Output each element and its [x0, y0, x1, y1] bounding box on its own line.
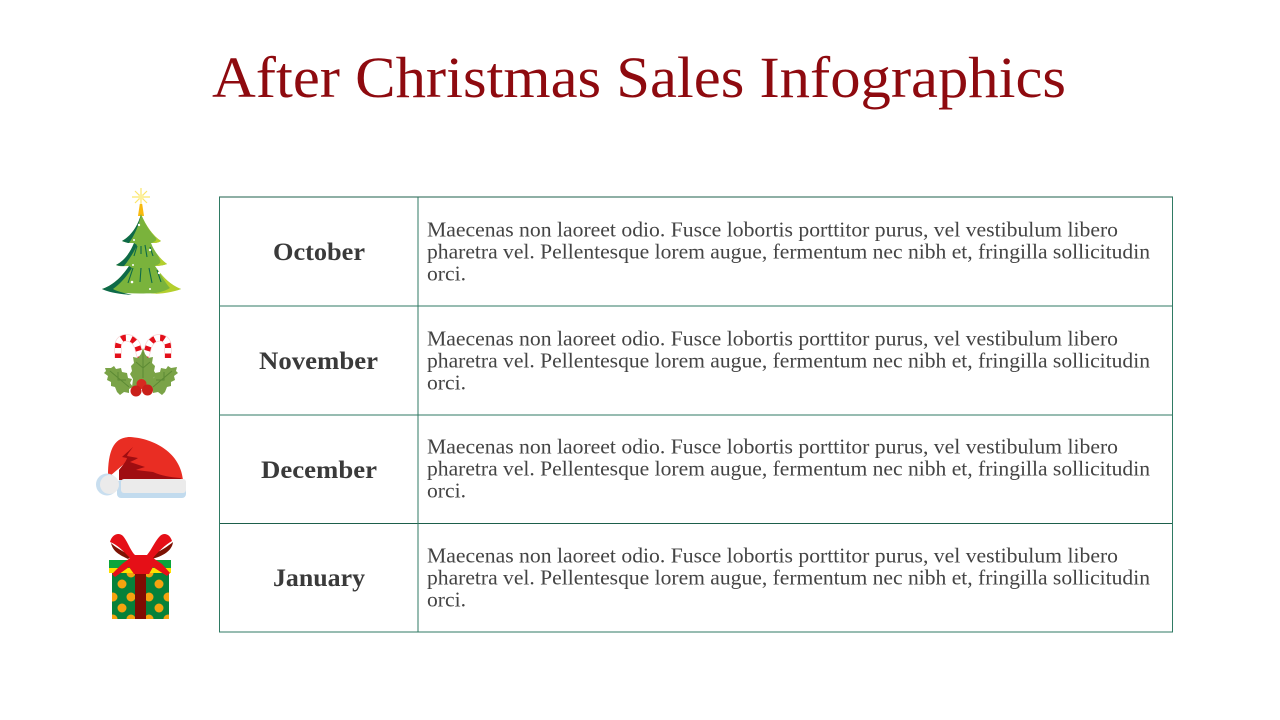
row: November: November [259, 348, 378, 375]
row: January: orci. [427, 588, 466, 612]
row: January: Maecenas non laoreet odio. Fusce lobortis porttitor purus, vel vestibulum libero [427, 544, 1118, 568]
row: November [259, 326, 1151, 394]
row: December [261, 434, 1151, 502]
row: December: December [261, 457, 377, 484]
row: January: January [273, 565, 366, 592]
row: November: Maecenas non laoreet odio. Fusce lobortis porttitor purus, vel vestibulum libero [427, 326, 1118, 350]
row: October: orci. [427, 262, 466, 286]
row: January: pharetra vel. Pellentesque lorem augue, fermentum nec nibh et, fringilla sollicitudin [427, 566, 1151, 590]
row: January [273, 544, 1151, 612]
icon: gift box [108, 534, 173, 624]
table grid [219, 197, 1173, 632]
row: October [273, 218, 1151, 286]
row: December: pharetra vel. Pellentesque lorem augue, fermentum nec nibh et, fringilla sollicitudin [427, 456, 1151, 480]
icon: candy canes and holly [104, 338, 178, 396]
row: November: orci. [427, 370, 466, 394]
row: October: October [273, 239, 365, 266]
row: October: pharetra vel. Pellentesque lorem augue, fermentum nec nibh et, fringilla sollicitudin [427, 240, 1151, 264]
row: November: pharetra vel. Pellentesque lorem augue, fermentum nec nibh et, fringilla sollicitudin [427, 348, 1151, 372]
icon: christmas tree [102, 188, 181, 295]
title: After Christmas Sales Infographics [212, 45, 1066, 110]
icon: santa hat [96, 437, 186, 498]
row: December: Maecenas non laoreet odio. Fusce lobortis porttitor purus, vel vestibulum libero [427, 434, 1118, 458]
row: December: orci. [427, 478, 466, 502]
row: October: Maecenas non laoreet odio. Fusce lobortis porttitor purus, vel vestibulum libero [427, 218, 1118, 242]
